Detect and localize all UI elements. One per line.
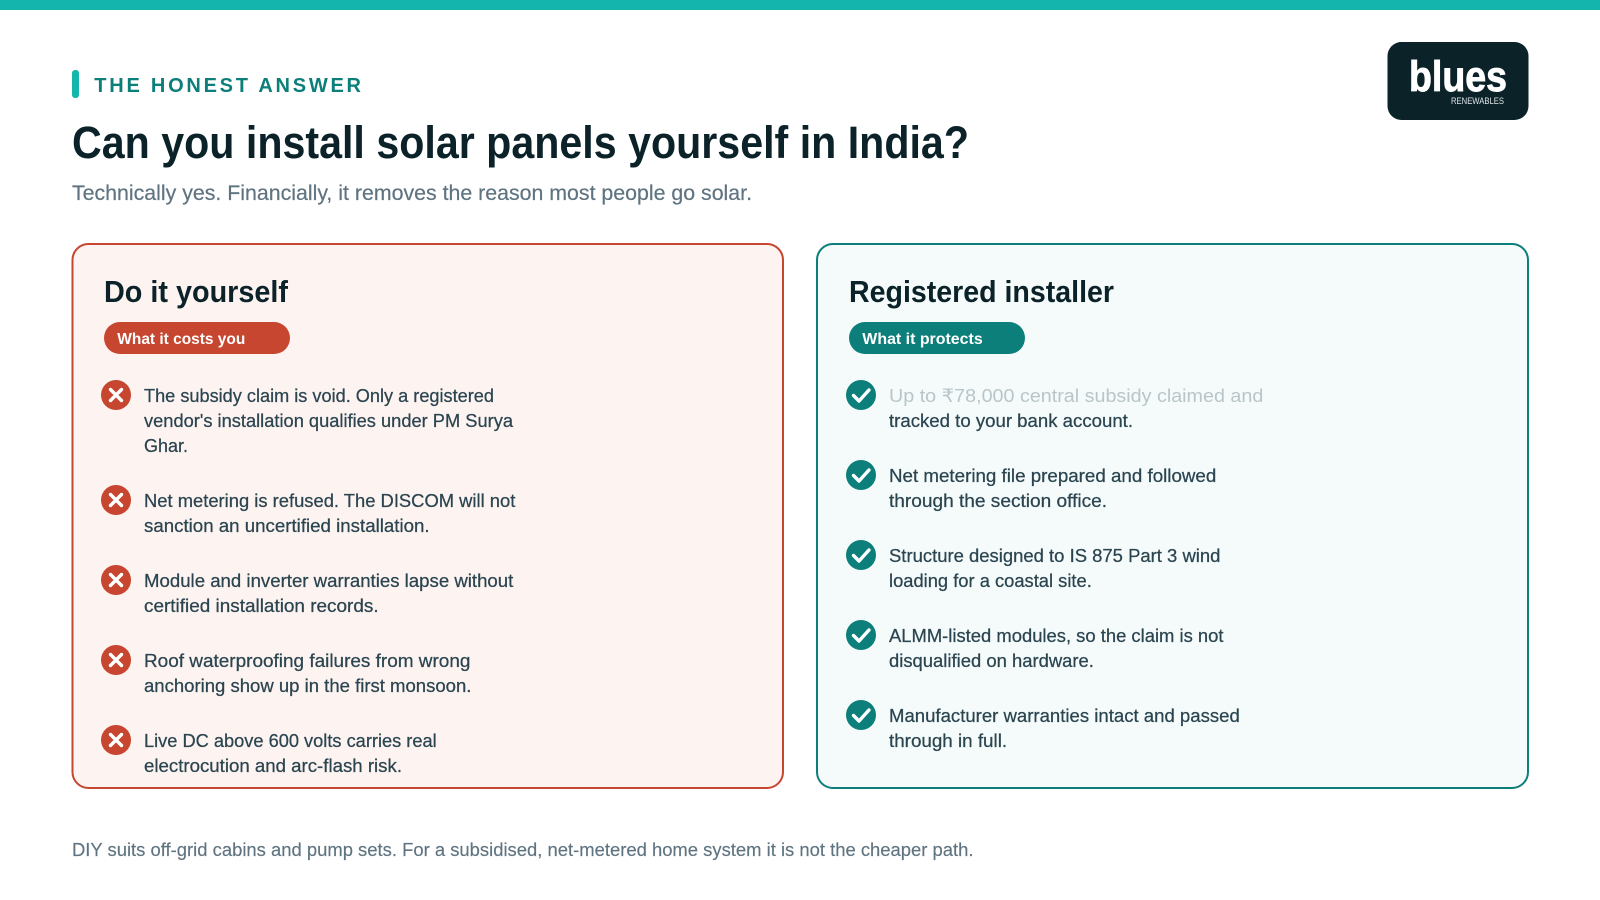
item: roof waterproofing: Roof waterproofing failures from wrong (144, 650, 470, 671)
title: Can you install solar panels yourself in India? (72, 117, 969, 168)
item: central subsidy (846, 380, 1263, 431)
item: subsidy claim void (101, 380, 514, 456)
item: structure design: loading for a coastal site. (889, 570, 1092, 591)
eyebrow heading: THE HONEST ANSWER (94, 75, 362, 97)
item: central subsidy: Up to ₹78,000 central subsidy claimed and (889, 385, 1263, 406)
logo: blues renewables: blues (1409, 53, 1507, 101)
item: live DC risk: Live DC above 600 volts carries real (144, 730, 437, 751)
item: net metering refused: sanction an uncertified installation. (144, 515, 430, 536)
footer note: DIY suits off-grid cabins and pump sets. For a subsidised, net-metered home system it is not the cheaper path. (72, 840, 973, 860)
item: warranties lapse (101, 565, 513, 616)
badge: what it costs you: What it costs you (117, 331, 245, 348)
item: structure design (846, 540, 1220, 591)
item: net metering file: through the section office. (889, 490, 1107, 511)
item: ALMM-listed modules: ALMM-listed modules, so the claim is not (889, 625, 1224, 646)
item: warranties lapse: Module and inverter warranties lapse without (144, 570, 513, 591)
item: subsidy claim void: vendor's installation qualifies under PM Surya (144, 410, 514, 431)
item: live DC risk: electrocution and arc-flash risk. (144, 755, 402, 776)
badge: what it protects: What it protects (862, 331, 983, 348)
item: ALMM-listed modules: disqualified on hardware. (889, 650, 1094, 671)
item: live DC risk (101, 725, 437, 776)
item: roof waterproofing (101, 645, 471, 696)
item: central subsidy: tracked to your bank account. (889, 410, 1133, 431)
panel: registered installer (817, 244, 1528, 788)
item: subsidy claim void: Ghar. (144, 435, 188, 456)
item: structure design: Structure designed to IS 875 Part 3 wind (889, 545, 1220, 566)
panel heading: registered installer: Registered installer (849, 274, 1114, 309)
item: net metering file: Net metering file prepared and followed (889, 465, 1216, 486)
badge: what it costs you (104, 322, 290, 354)
item: net metering file (846, 460, 1216, 511)
item: manufacturer warranties (846, 700, 1240, 751)
top accent bar (0, 0, 1600, 10)
item: manufacturer warranties: through in full. (889, 730, 1007, 751)
panel heading: do it yourself: Do it yourself (104, 274, 289, 309)
subtitle: Technically yes. Financially, it removes the reason most people go solar. (72, 181, 752, 205)
logo: blues renewables (1388, 42, 1528, 120)
panel: do it yourself (72, 244, 783, 788)
item: roof waterproofing: anchoring show up in the first monsoon. (144, 675, 471, 696)
badge: what it protects (849, 322, 1025, 354)
item: ALMM-listed modules (846, 620, 1224, 671)
logo: blues renewables: RENEWABLES (1451, 96, 1504, 106)
item: net metering refused (101, 485, 515, 536)
item: net metering refused: Net metering is refused. The DISCOM will not (144, 490, 515, 511)
item: manufacturer warranties: Manufacturer warranties intact and passed (889, 705, 1240, 726)
item: subsidy claim void: The subsidy claim is void. Only a registered (144, 385, 494, 406)
item: warranties lapse: certified installation records. (144, 595, 379, 616)
